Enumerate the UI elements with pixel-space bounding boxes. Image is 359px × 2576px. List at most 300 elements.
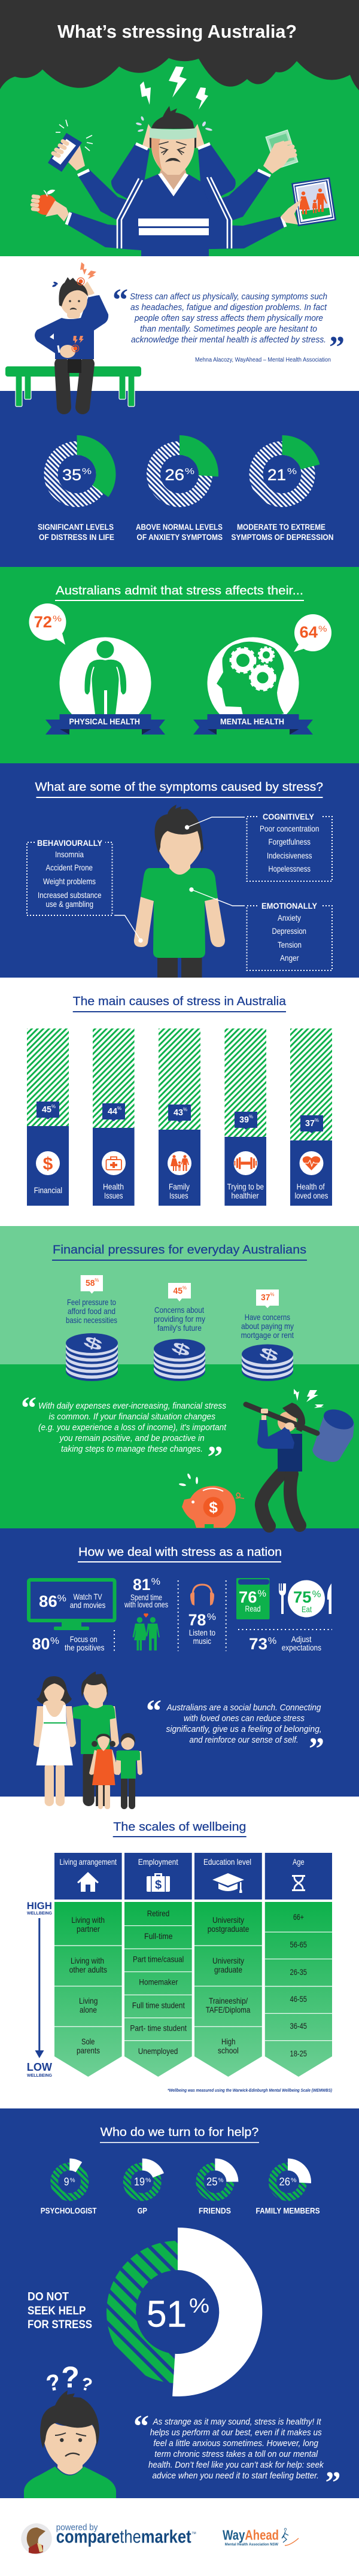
- stat: adjust expectations: %: [268, 1636, 276, 1646]
- quote: financial stress: (e.g. you experience a loss of income), it's important: [38, 1423, 227, 1433]
- face: [44, 2423, 96, 2466]
- bar: health of loved ones 37 percent: loved ones: [294, 1191, 328, 1200]
- heading: stress affects: Australians admit that stress affects their...: [56, 584, 303, 597]
- man with hammer: [246, 1389, 357, 1526]
- bar: financial 45 percent: Financial: [34, 1185, 62, 1195]
- quote: social bunch: with loved ones can reduce stress: [184, 1714, 305, 1724]
- hands on head: [142, 124, 205, 148]
- table column: employment: [124, 1853, 192, 2077]
- icon: briefcase: [147, 1873, 170, 1892]
- heading: who do we turn to: Who do we turn to for help?: [101, 2125, 258, 2139]
- donut: 26 percent anxiety: 26: [165, 466, 184, 484]
- bar: trying to be healthier 39 percent: Trying to be: [227, 1182, 264, 1191]
- donut labels: MODERATE TO EXTREME: [237, 523, 325, 532]
- bar: health issues 44 percent: [93, 1028, 135, 1206]
- wellbeing scale arrow: [27, 1900, 52, 2078]
- man: [73, 1671, 119, 1806]
- wellbeing scale arrow: WELLBEING: [27, 1910, 52, 1916]
- gears: [231, 648, 275, 690]
- quote: physical symptoms: Stress can affect us physically, causing symptoms such: [130, 292, 327, 302]
- donut: 21 percent depression: %: [287, 466, 297, 477]
- table column: education level: postgraduate: [208, 1924, 250, 1934]
- icon: graduation cap: [212, 1873, 244, 1893]
- stat: focus on the positives: the positives: [65, 1643, 104, 1652]
- label: do not seek help: FOR STRESS: [28, 2319, 92, 2331]
- body: [182, 1486, 236, 1528]
- wellbeing scale arrow: WELLBEING: [27, 2073, 52, 2078]
- stat: read: %: [257, 1589, 266, 1599]
- neck: [159, 168, 187, 190]
- table column: employment: Homemaker: [139, 1977, 178, 1987]
- donut: family members 26 percent: [256, 2159, 320, 2216]
- table column: living arrangement: Sole: [81, 2037, 95, 2046]
- logo: comparethemarket: TM: [191, 2532, 196, 2535]
- logo: wayahead: WayAhead: [223, 2528, 279, 2543]
- icon: heart: [144, 1613, 148, 1618]
- big donut: 51 percent do not seek help: %: [189, 2295, 209, 2317]
- table column: employment: Full-time: [144, 1931, 173, 1941]
- stat: eat: [279, 1580, 331, 1618]
- box: behaviourally: Increased substance: [38, 890, 102, 900]
- quote: physical symptoms: acknowledge their mental health is affected by stress.: [131, 335, 326, 345]
- table column: living arrangement: [54, 1853, 122, 2077]
- big donut: 51 percent do not seek help: 51: [147, 2294, 187, 2335]
- stat: spend time with loved ones: Spend time: [130, 1592, 162, 1602]
- box: cognitively: [247, 812, 332, 881]
- icon: house: [77, 1872, 99, 1892]
- donut labels: SIGNIFICANT LEVELS: [38, 523, 114, 532]
- donut: 35 percent distress: 35: [62, 466, 81, 484]
- big donut: 51 percent do not seek help: [121, 2228, 262, 2396]
- donut labels: SYMPTOMS OF DEPRESSION: [231, 533, 334, 542]
- hammer head: [312, 1412, 354, 1462]
- symptom figure: [134, 805, 225, 978]
- table column: age: 66+: [293, 1912, 304, 1922]
- coin stack: 45 percent: family's future: [157, 1323, 202, 1333]
- raised hand: [82, 281, 95, 296]
- donut: gp 19 percent: [127, 2159, 164, 2216]
- speech bubble 72 percent: 72: [34, 613, 52, 631]
- coin stack: 37 percent: about paying my: [241, 1321, 294, 1331]
- quote: stress is healthy: feel a little anxious sometimes. However, long: [153, 2439, 318, 2448]
- coin: [203, 1497, 224, 1517]
- coin stack: 58 percent: afford food and: [68, 1306, 115, 1316]
- facial features: [69, 300, 80, 310]
- television icon with stat: %: [57, 1594, 66, 1604]
- drips: [179, 1473, 198, 1486]
- logo: wayahead: Mental Health Association NSW: [225, 2542, 279, 2547]
- stat: adjust expectations: 73: [249, 1635, 267, 1653]
- quote: social bunch: [146, 1694, 324, 1766]
- legs: [157, 955, 202, 978]
- coin stack: 45 percent: %: [182, 1285, 187, 1291]
- speech bubble 72 percent: [29, 603, 66, 645]
- pain markers: [72, 262, 96, 352]
- face: [151, 138, 194, 175]
- donut: psychologist 9 percent: 9: [64, 2176, 69, 2188]
- logo: comparethemarket: [21, 2523, 196, 2554]
- table column: living arrangement: parents: [77, 2046, 100, 2055]
- table column: employment: Part- time student: [130, 2023, 187, 2033]
- logo: comparethemarket: comparethemarket: [56, 2526, 191, 2547]
- box: behaviourally: [27, 838, 112, 915]
- donut: 35 percent distress: [51, 435, 116, 500]
- donut: 26 percent anxiety: %: [185, 466, 194, 477]
- stat: adjust expectations: [249, 1634, 321, 1653]
- quote: financial stress: [21, 1391, 227, 1474]
- legs: [62, 364, 87, 407]
- runner figure: [282, 2528, 299, 2545]
- table column: education level: [194, 1853, 262, 2077]
- hand on stomach: [60, 345, 75, 358]
- quote: physical symptoms: as headaches, fatigue and digestion problems. In fact: [130, 303, 327, 312]
- icon: book: [236, 1578, 269, 1619]
- icon: plate: [288, 1580, 325, 1618]
- bar: family issues 43 percent: 43: [174, 1108, 183, 1118]
- sweat drops: [136, 116, 212, 132]
- bar: family issues 43 percent: %: [183, 1107, 187, 1112]
- quote: stress is healthy: term chronic stress takes a toll on our mental: [154, 2450, 318, 2459]
- wellbeing scale arrow: LOW: [27, 2061, 52, 2073]
- question marks: ?: [79, 2374, 95, 2396]
- box: cognitively: Indecisiveness: [267, 851, 312, 860]
- woman: [34, 1676, 76, 1806]
- donut: 35 percent distress: %: [82, 466, 92, 477]
- quote: stress is healthy: health. Don’t feel like you can’t ask for help: seek: [148, 2460, 324, 2470]
- mental health badge: [193, 614, 331, 735]
- quote: stress is healthy: “: [133, 2410, 149, 2444]
- coin stack: 58 percent: $: [81, 1333, 105, 1354]
- quote: financial stress: With daily expenses ever-increasing, financial stress: [38, 1401, 226, 1411]
- table column: living arrangement: Living: [79, 1996, 98, 2005]
- speech bubble 72 percent: %: [53, 614, 62, 623]
- stat: read: 76: [239, 1588, 257, 1606]
- icon: headphones: [190, 1585, 214, 1606]
- table column: living arrangement: Living with: [71, 1956, 104, 1965]
- quote: social bunch: “: [146, 1694, 162, 1728]
- donut: friends 25 percent: FRIENDS: [199, 2206, 231, 2216]
- coin stack: 37 percent: [241, 1289, 294, 1381]
- arms: [134, 897, 225, 947]
- quote: social bunch: and reinforce our sense of self.: [189, 1735, 299, 1745]
- eyes and brows: [159, 142, 186, 154]
- box: behaviourally: BEHAVIOURALLY: [37, 838, 103, 848]
- stat: spend time with loved ones: %: [151, 1577, 160, 1587]
- quote: physical symptoms: ”: [329, 330, 345, 365]
- donut: family members 26 percent: 26: [279, 2176, 290, 2188]
- table column: age: 26-35: [290, 1967, 307, 1977]
- table column: age: 46-55: [290, 1994, 307, 2004]
- table column: education level: University: [212, 1915, 244, 1925]
- bar: trying to be healthier 39 percent: %: [249, 1114, 253, 1119]
- hammer handle: [246, 1404, 317, 1433]
- box: cognitively: Forgetfulness: [268, 837, 311, 846]
- arms: [257, 1420, 294, 1449]
- quote: stress is healthy: advice when you need it to start feeling better.: [152, 2471, 319, 2481]
- girl: [89, 1734, 119, 1809]
- stat: spend time with loved ones: [124, 1576, 168, 1650]
- neck: [57, 2457, 83, 2475]
- face: [158, 830, 202, 865]
- stressed man with many arms: [66, 106, 286, 256]
- stat: focus on the positives: Focus on: [70, 1634, 98, 1644]
- quote: financial stress: is common. If your financial situation changes: [49, 1412, 215, 1422]
- stat: read: [236, 1578, 269, 1619]
- quote: stress is healthy: As strange as it may sound, stress is healthy! It: [153, 2417, 321, 2427]
- icon: couple: [133, 1617, 160, 1650]
- piggy bank: [179, 1473, 244, 1528]
- label: do not seek help: DO NOT: [28, 2291, 69, 2304]
- bar: trying to be healthier 39 percent: [224, 1028, 266, 1206]
- bar: health issues 44 percent: Health: [103, 1182, 124, 1191]
- box: emotionally: [247, 901, 332, 970]
- icon: family: [171, 1155, 189, 1171]
- coin stack: 58 percent: %: [95, 1278, 99, 1283]
- speech bubble 64 percent: [294, 614, 331, 652]
- table column: living arrangement: partner: [77, 1924, 100, 1934]
- donut: psychologist 9 percent: %: [70, 2177, 75, 2184]
- ribbon: PHYSICAL HEALTH: [69, 717, 140, 726]
- heading: main causes: The main causes of stress in Australia: [73, 994, 287, 1008]
- stat: adjust expectations: Adjust: [291, 1634, 312, 1644]
- box: emotionally: Depression: [272, 926, 306, 936]
- stat: eat: %: [312, 1589, 321, 1600]
- ribbon: [45, 714, 165, 735]
- quote: financial stress: you remain positive, and be proactive in: [59, 1434, 205, 1443]
- worried person: [24, 2360, 116, 2498]
- box: behaviourally: Accident Prone: [45, 863, 93, 872]
- table column: age: 18-25: [290, 2049, 307, 2058]
- face: [278, 1412, 297, 1432]
- donut: gp 19 percent: GP: [138, 2206, 147, 2216]
- connector lines: [114, 817, 245, 942]
- donut: friends 25 percent: [199, 2159, 238, 2216]
- headband: [150, 128, 197, 139]
- icon: hourglass: [292, 1875, 305, 1891]
- face: [60, 283, 87, 315]
- coin stack: 37 percent: mortgage or rent: [241, 1330, 294, 1340]
- coin stack: 37 percent: $: [257, 1344, 281, 1366]
- box: behaviourally: Insomnia: [55, 849, 84, 859]
- quote: physical symptoms: “: [112, 283, 128, 317]
- legs: [261, 1474, 300, 1526]
- bar: health of loved ones 37 percent: 37: [305, 1118, 315, 1128]
- box: behaviourally: Weight problems: [43, 876, 96, 886]
- table column: age: 36-45: [290, 2021, 307, 2031]
- table column: education level: Traineeship/: [209, 1996, 248, 2005]
- table column: education level: Education level: [203, 1857, 251, 1867]
- lower arms: [67, 212, 286, 250]
- table column: education level: High: [221, 2037, 235, 2046]
- box: emotionally: Tension: [278, 940, 302, 949]
- coin stack: 37 percent: 37: [261, 1292, 270, 1303]
- title: What’s stressing Australia?: [57, 21, 297, 42]
- coin stack: 58 percent: basic necessities: [66, 1315, 117, 1325]
- logo: wayahead: [223, 2528, 299, 2547]
- question marks: ?: [44, 2369, 63, 2397]
- physical health badge: [29, 603, 165, 735]
- quote: financial stress: “: [21, 1391, 36, 1425]
- table column: living arrangement: alone: [80, 2005, 97, 2014]
- heading: how we deal: How we deal with stress as a nation: [78, 1545, 282, 1559]
- stat: listen to music: music: [193, 1636, 211, 1646]
- icon: apple in hand: [32, 190, 69, 222]
- quote: physical symptoms: [112, 283, 345, 365]
- hair: [40, 2390, 99, 2448]
- bar: trying to be healthier 39 percent: healthier: [231, 1191, 259, 1200]
- stat: listen to music: [188, 1585, 216, 1646]
- neck: [169, 859, 190, 875]
- bar: health of loved ones 37 percent: [290, 1028, 332, 1206]
- arm separators: [91, 667, 120, 694]
- coin stack: 45 percent: [154, 1283, 205, 1381]
- head silhouette: [217, 642, 284, 714]
- bar: trying to be healthier 39 percent: 39: [239, 1115, 249, 1125]
- question marks: [44, 2360, 95, 2397]
- bar: health of loved ones 37 percent: Health of: [297, 1182, 325, 1191]
- table column: education level: University: [212, 1956, 244, 1965]
- collar: [158, 173, 188, 196]
- box: emotionally: Anxiety: [278, 913, 301, 923]
- table column: education level: TAFE/Diploma: [206, 2005, 250, 2014]
- coin stack: 37 percent: %: [270, 1292, 274, 1297]
- donut labels: OF DISTRESS IN LIFE: [39, 533, 114, 542]
- bar: health issues 44 percent: Issues: [104, 1191, 123, 1200]
- coin stack: 58 percent: [66, 1275, 118, 1381]
- donut: gp 19 percent: %: [145, 2177, 151, 2184]
- bar: financial 45 percent: 45: [42, 1105, 51, 1115]
- bolts: [294, 1389, 324, 1408]
- wrist cuffs: [66, 144, 285, 227]
- mouth: [65, 2453, 80, 2456]
- quote: financial stress: taking steps to manage these changes.: [61, 1445, 203, 1454]
- stat: spend time with loved ones: 81: [133, 1576, 150, 1594]
- ribbon: [193, 714, 313, 735]
- body figure: [84, 641, 126, 714]
- box: behaviourally: use & gambling: [45, 899, 93, 909]
- donut: psychologist 9 percent: PSYCHOLOGIST: [41, 2206, 97, 2216]
- donut: 21 percent depression: [256, 435, 320, 500]
- bar: financial 45 percent: %: [51, 1104, 56, 1109]
- speech bubble 64 percent: %: [318, 624, 327, 633]
- eye: [191, 1500, 194, 1504]
- icon: heart with pulse: [303, 1156, 320, 1170]
- heading: scales of wellbeing: The scales of wellbeing: [113, 1820, 246, 1834]
- donut labels: ABOVE NORMAL LEVELS: [136, 523, 223, 532]
- white circle: [207, 637, 299, 714]
- hair: [282, 1403, 305, 1432]
- box: cognitively: Hopelessness: [268, 864, 311, 873]
- stat: listen to music: %: [207, 1612, 216, 1622]
- speech bubble 64 percent: 64: [299, 623, 318, 641]
- table column: employment: $: [155, 1879, 162, 1892]
- face shadow: [151, 138, 163, 172]
- stat: focus on the positives: [32, 1634, 104, 1653]
- stat: read: Read: [245, 1604, 261, 1613]
- bench: [5, 366, 141, 406]
- icon: phone in hand: [48, 120, 93, 172]
- chest stripes: [138, 219, 209, 235]
- sweat drops: [52, 281, 58, 287]
- bar: health issues 44 percent: 44: [108, 1106, 118, 1116]
- stat: focus on the positives: 80: [32, 1635, 50, 1653]
- footnote: *Wellbeing was measured using the Warwick-Edinburgh Mental Wellbeing Scale (WEMWBS): [168, 2089, 333, 2093]
- coin stack: 37 percent: Have concerns: [245, 1312, 290, 1322]
- piggy bank: $: [209, 1498, 218, 1516]
- bar: family issues 43 percent: Issues: [169, 1191, 188, 1200]
- stat: listen to music: Listen to: [189, 1628, 215, 1637]
- coin stack: 58 percent: 58: [86, 1278, 95, 1288]
- question marks: ?: [61, 2360, 80, 2394]
- body and arms: [35, 295, 108, 359]
- heading: symptoms: What are some of the symptoms caused by stress?: [35, 780, 323, 794]
- stat: eat: Eat: [302, 1604, 312, 1614]
- heading: financial pressures: Financial pressures for everyday Australians: [53, 1243, 306, 1257]
- table column: age: [265, 1853, 332, 2077]
- boy: [115, 1733, 142, 1809]
- bar: financial 45 percent: [27, 1028, 69, 1206]
- table column: education level: school: [218, 2046, 239, 2055]
- donut labels: OF ANXIETY SYMPTOMS: [136, 533, 223, 542]
- hair: [151, 106, 194, 129]
- highlight: [203, 1488, 223, 1491]
- label: do not seek help: SEEK HELP: [28, 2305, 86, 2317]
- eyebrows: [55, 2433, 86, 2436]
- bar: family issues 43 percent: [159, 1028, 200, 1206]
- wellbeing scale arrow: HIGH: [27, 1900, 52, 1911]
- shirt: [24, 2466, 116, 2498]
- table column: employment: Employment: [138, 1857, 178, 1867]
- table column: age: 56-65: [290, 1940, 307, 1949]
- television icon with stat: Watch TV: [73, 1592, 102, 1601]
- box: emotionally: EMOTIONALLY: [261, 901, 318, 911]
- box: cognitively: COGNITIVELY: [263, 812, 315, 821]
- stat: adjust expectations: expectations: [282, 1643, 321, 1652]
- coin stack: 45 percent: Concerns about: [154, 1305, 204, 1315]
- icon: lightning bolts: [140, 66, 208, 110]
- box: cognitively: Poor concentration: [260, 824, 320, 833]
- label: do not seek help: [28, 2291, 92, 2331]
- t-shirt: [141, 868, 218, 958]
- donut: friends 25 percent: 25: [206, 2176, 218, 2188]
- television icon with stat: and movies: [70, 1600, 105, 1610]
- hair: [154, 805, 203, 853]
- quote: physical symptoms: than mentally. Sometimes people are hesitant to: [140, 324, 317, 334]
- bar: family issues 43 percent: Family: [169, 1182, 190, 1191]
- family illustration: [34, 1671, 142, 1809]
- torso: [117, 174, 232, 256]
- donut: psychologist 9 percent: [41, 2159, 97, 2216]
- bar: health of loved ones 37 percent: %: [315, 1118, 319, 1123]
- icon: first aid kit: [107, 1157, 121, 1170]
- eyes: [60, 2438, 82, 2442]
- donut: family members 26 percent: FAMILY MEMBERS: [256, 2206, 320, 2216]
- quote: stress is healthy: helps us perform at our best, even if it makes us: [150, 2428, 322, 2438]
- table column: employment: Part time/casual: [133, 1955, 184, 1964]
- icon: knife: [327, 1583, 331, 1614]
- seated man with headache: [5, 262, 141, 407]
- upper arms: [111, 144, 236, 202]
- coin stack: 45 percent: $: [169, 1339, 193, 1360]
- side hair: [150, 138, 196, 148]
- table column: living arrangement: Living with: [71, 1915, 105, 1925]
- quote: social bunch: significantly, give us a feeling of belonging,: [166, 1725, 322, 1734]
- table column: employment: Retired: [147, 1909, 169, 1918]
- table column: living arrangement: Living arrangement: [60, 1857, 117, 1867]
- icon: fork: [279, 1583, 286, 1614]
- attribution: Mehna Alacozy, WayAhead – Mental Health Association: [195, 357, 331, 363]
- quote: social bunch: Australians are a social bunch. Connecting: [166, 1703, 321, 1713]
